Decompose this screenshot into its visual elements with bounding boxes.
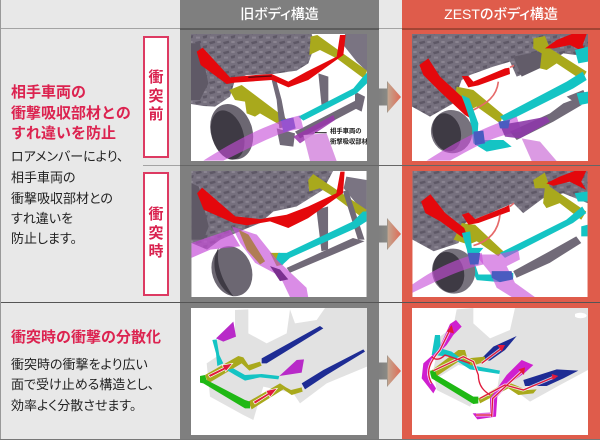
cyan lower member	[462, 47, 588, 152]
gray lower members	[510, 90, 588, 140]
header: old body structure	[180, 0, 379, 28]
image: ZEST body before collision	[412, 34, 588, 161]
magenta members	[422, 320, 533, 419]
olive members	[270, 174, 367, 266]
label: other vehicle absorber: 相手車両の	[330, 126, 362, 135]
engine block	[412, 171, 588, 251]
image: old body at collision	[191, 171, 367, 297]
heading: dispersing impact: 衝突時の衝撃の分散化	[11, 329, 161, 346]
cyan lower member	[276, 211, 367, 266]
text block: lower member description: ロアメンバーにより、	[11, 149, 124, 164]
ghost frame	[433, 308, 588, 407]
text block: lower member description: 相手車両の	[11, 170, 76, 185]
heading: prevent misalignment: すれ違いを防止	[11, 125, 116, 142]
olive members	[229, 35, 367, 126]
red members	[421, 171, 586, 240]
label: at collision: 時	[148, 243, 164, 260]
olive members	[430, 350, 537, 403]
label: at collision: 突	[148, 225, 164, 242]
cyan members	[212, 339, 279, 381]
heading: prevent misalignment	[11, 84, 131, 142]
label: other vehicle absorber	[315, 126, 369, 146]
heading: prevent misalignment: 衝撃吸収部材との	[11, 105, 131, 122]
gray lower members	[287, 190, 365, 273]
green cross member	[429, 371, 478, 404]
label: before collision	[143, 36, 169, 158]
header: ZEST body structure	[402, 0, 600, 28]
impact flow arrows	[429, 328, 555, 417]
image: old body force flow	[191, 308, 367, 435]
ghost frame	[207, 308, 367, 420]
red lower member	[197, 35, 346, 87]
label: at collision	[143, 172, 169, 296]
tire	[205, 241, 259, 302]
image: ZEST body force flow	[412, 308, 588, 435]
cyan lower member	[462, 192, 588, 282]
blue members	[262, 326, 365, 389]
column: old body	[180, 0, 379, 440]
label: before collision: 衝	[148, 69, 164, 86]
header: old body structure: 旧ボディ構造	[240, 6, 319, 22]
other vehicle absorber	[427, 117, 557, 161]
arrow: row 1	[379, 81, 401, 113]
cyan lower member	[298, 73, 367, 121]
column: ZEST body	[402, 0, 600, 440]
gray lower members	[513, 236, 581, 278]
arrow: row 3	[379, 355, 401, 387]
header: ZEST body structure: ZESTのボディ構造	[444, 6, 558, 22]
text block: dispersion description: 効率よく分散させます。	[11, 398, 136, 413]
other vehicle absorber	[203, 115, 337, 161]
text block: lower member description: 衝撃吸収部材との	[11, 191, 113, 206]
gray lower members	[272, 73, 365, 147]
text block: dispersion description: 面で受け止める構造とし、	[11, 377, 154, 392]
red members	[419, 34, 587, 118]
arrow: row 2	[379, 218, 401, 250]
text block: dispersion description	[11, 357, 154, 413]
olive members	[205, 356, 303, 409]
absorber	[412, 250, 535, 297]
red member	[197, 172, 345, 228]
olive members	[453, 36, 587, 123]
blue members	[480, 336, 578, 386]
magenta absorbers	[216, 322, 304, 376]
green cross member	[200, 375, 250, 408]
label: other vehicle absorber: 衝撃吸収部材	[330, 137, 367, 146]
engine block	[191, 171, 367, 250]
label: at collision: 衝	[148, 206, 164, 223]
cyan members	[432, 335, 500, 374]
text block: dispersion description: 衝突時の衝撃をより広い	[11, 357, 148, 372]
image: ZEST body at collision	[412, 171, 588, 297]
crushed absorber	[191, 226, 308, 297]
tire	[203, 98, 260, 165]
label: before collision: 突	[148, 88, 164, 105]
tire	[426, 105, 477, 158]
engine block	[412, 34, 588, 117]
text block: lower member description: すれ違いを	[11, 211, 73, 226]
image: old body before collision	[191, 34, 367, 161]
heading: prevent misalignment: 相手車両の	[11, 84, 86, 101]
impact arrows	[208, 363, 277, 404]
engine block	[191, 34, 367, 107]
text block: lower member description	[11, 149, 124, 246]
blue joint	[281, 117, 296, 133]
label: before collision: 前	[148, 106, 164, 123]
text block: lower member description: 防止します。	[11, 231, 77, 246]
olive members	[454, 173, 586, 256]
tire	[427, 244, 480, 298]
